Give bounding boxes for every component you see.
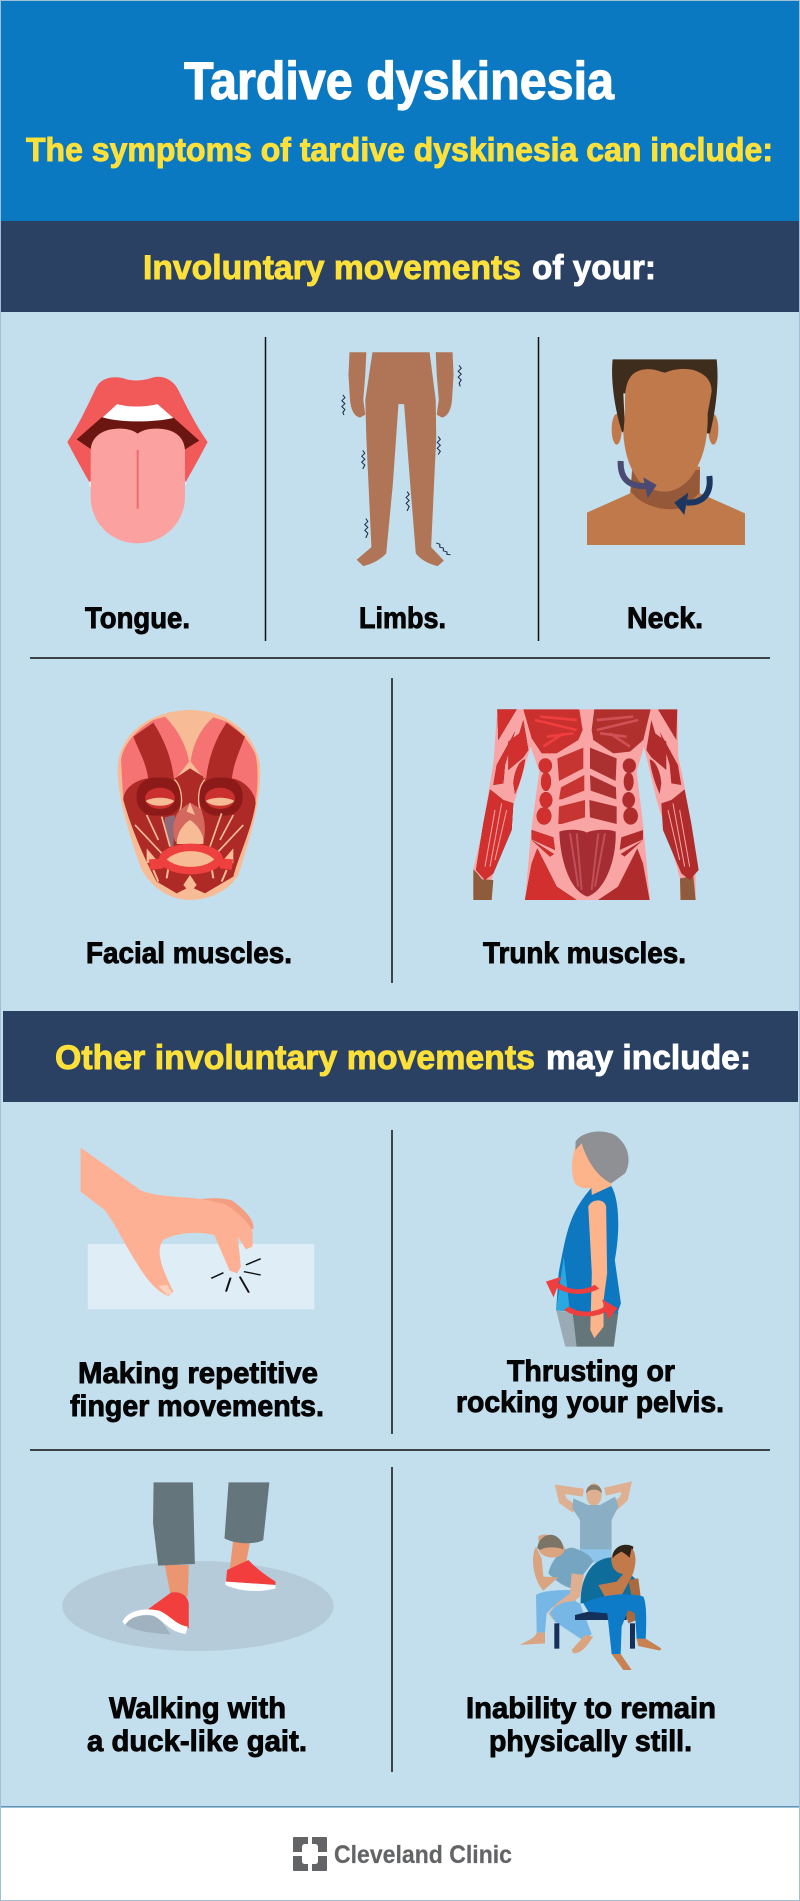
label: repetitive finger movements: Making repetitive xyxy=(78,1357,318,1390)
icon: facial muscles xyxy=(118,710,260,900)
icon: three restless people xyxy=(520,1483,661,1670)
section heading band: involuntary movements: of your: xyxy=(532,249,656,287)
section heading band: involuntary movements: Involuntary movements xyxy=(143,249,521,287)
label: repetitive finger movements: finger movements. xyxy=(70,1390,324,1423)
footer panel xyxy=(0,1806,800,1901)
section heading band: involuntary movements xyxy=(0,221,800,312)
label: limbs: Limbs. xyxy=(359,602,446,635)
icon: trunk muscles xyxy=(473,709,699,900)
icon: tongue xyxy=(67,377,208,543)
header panel xyxy=(0,0,800,221)
icon: neck with rotation arrows xyxy=(587,359,745,545)
icon: repetitive finger movements xyxy=(81,1148,314,1309)
icon: limbs with tremor marks xyxy=(342,352,461,566)
label: inability to remain still xyxy=(466,1692,716,1758)
icon: Cleveland Clinic logo xyxy=(293,1837,327,1871)
label: rocking pelvis: Thrusting or xyxy=(507,1355,675,1388)
label: duck-like gait xyxy=(87,1692,307,1758)
label: duck-like gait: Walking with xyxy=(109,1692,286,1725)
label: tongue: Tongue. xyxy=(85,602,190,635)
section heading band: other involuntary movements: may include: xyxy=(546,1039,751,1077)
label: inability to remain still: Inability to remain xyxy=(466,1692,716,1725)
label: rocking pelvis xyxy=(456,1355,724,1419)
icon: rocking pelvis figure xyxy=(546,1132,629,1347)
label: duck-like gait: a duck-like gait. xyxy=(87,1725,307,1758)
label: rocking pelvis: rocking your pelvis. xyxy=(456,1386,724,1419)
title: Tardive dyskinesia xyxy=(184,52,614,111)
label: trunk muscles: Trunk muscles. xyxy=(483,937,686,970)
section heading band: other involuntary movements xyxy=(3,1011,798,1102)
label: inability to remain still: physically still. xyxy=(489,1725,692,1758)
subtitle: The symptoms of tardive dyskinesia can include: xyxy=(26,131,773,168)
label: facial muscles: Facial muscles. xyxy=(86,937,292,970)
icon: duck-like gait feet xyxy=(62,1482,334,1651)
logo wordmark: Cleveland Clinic xyxy=(334,1841,512,1869)
label: repetitive finger movements xyxy=(70,1357,324,1423)
section heading band: other involuntary movements: Other involuntary movements xyxy=(55,1039,535,1077)
label: neck: Neck. xyxy=(627,602,703,635)
